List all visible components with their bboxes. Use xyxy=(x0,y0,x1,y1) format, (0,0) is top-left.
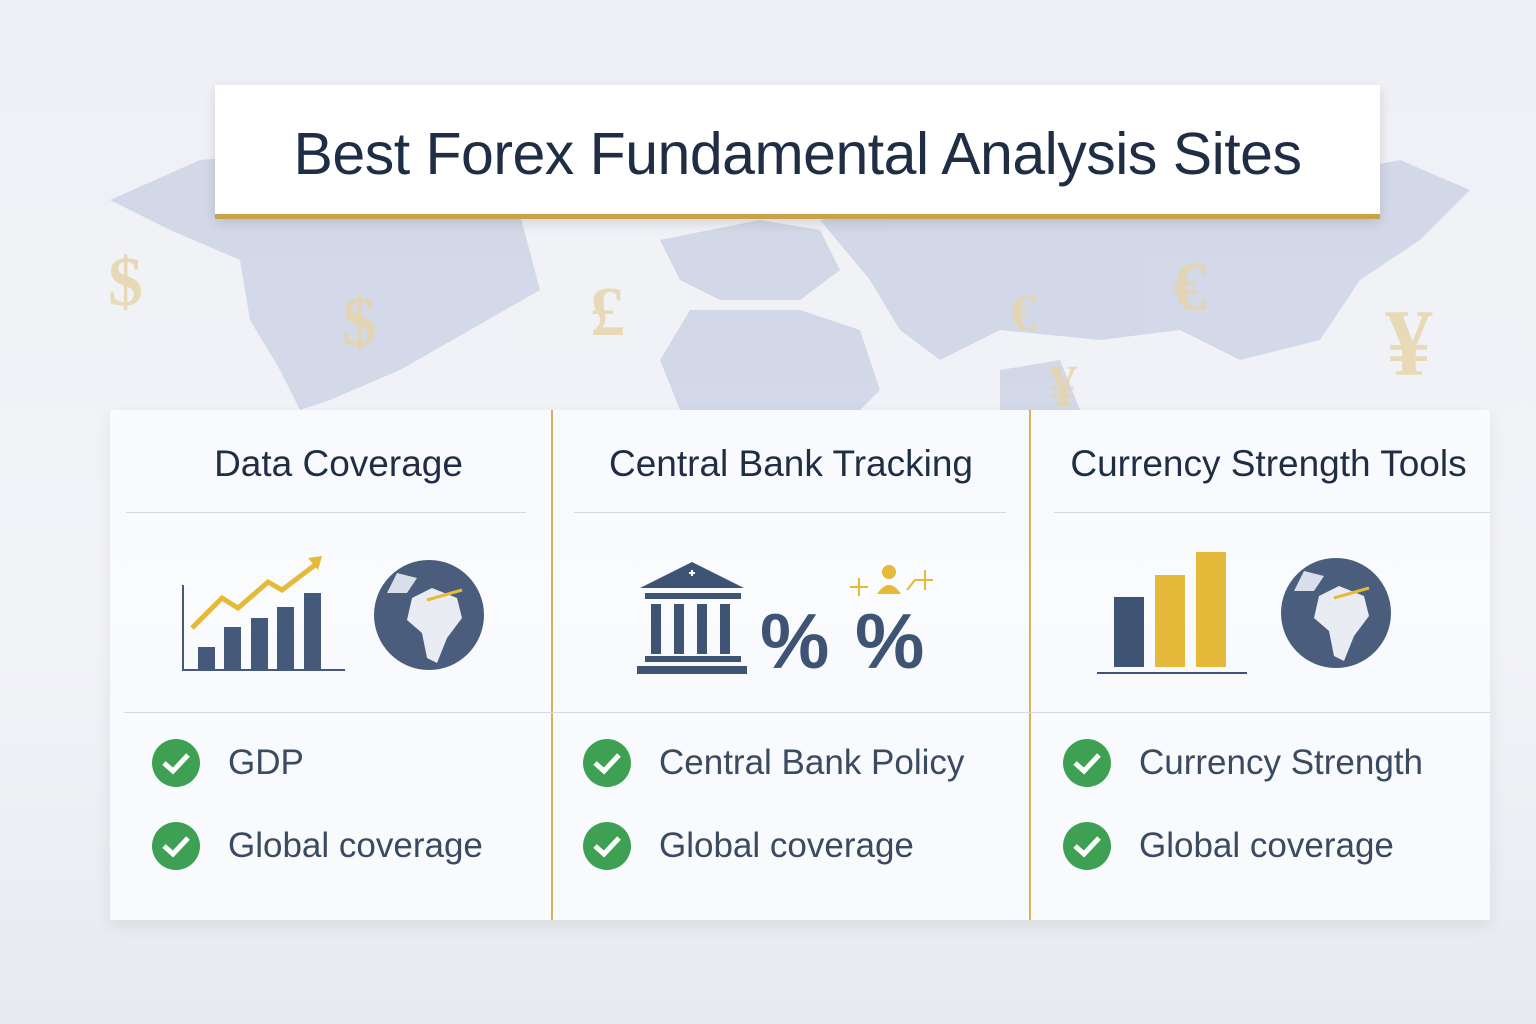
title: Best Forex Fundamental Analysis Sites xyxy=(294,120,1301,186)
list xyxy=(1063,739,1423,870)
list xyxy=(152,739,483,870)
heading: Central Bank Tracking xyxy=(609,443,973,484)
list: Global coverage xyxy=(228,826,483,865)
heading: Currency Strength Tools xyxy=(1070,443,1467,484)
world map background: £ xyxy=(590,274,625,351)
world map background: $ xyxy=(342,284,377,361)
list: Global coverage xyxy=(659,826,914,865)
icon: bar chart with arrow xyxy=(182,556,345,671)
world map background: € xyxy=(1010,285,1036,342)
icon: bank with percent xyxy=(637,562,933,680)
list: Currency Strength xyxy=(1139,743,1423,782)
icon: bars xyxy=(1097,552,1247,674)
column: central bank tracking xyxy=(583,443,973,870)
column: data coverage xyxy=(152,443,484,870)
list xyxy=(583,739,964,870)
world map background: $ xyxy=(108,244,143,321)
heading: Data Coverage xyxy=(214,443,463,484)
title xyxy=(215,85,1380,219)
list: Global coverage xyxy=(1139,826,1394,865)
icon: globe xyxy=(1281,558,1391,668)
panel: features xyxy=(110,410,1490,920)
column: currency strength tools xyxy=(1063,443,1467,870)
world map background xyxy=(108,159,1470,410)
world map background: ¥ xyxy=(1385,290,1433,396)
world map background: € xyxy=(1172,249,1207,326)
list: Central Bank Policy xyxy=(659,743,964,782)
icon: globe xyxy=(374,560,484,670)
list: GDP xyxy=(228,743,304,782)
